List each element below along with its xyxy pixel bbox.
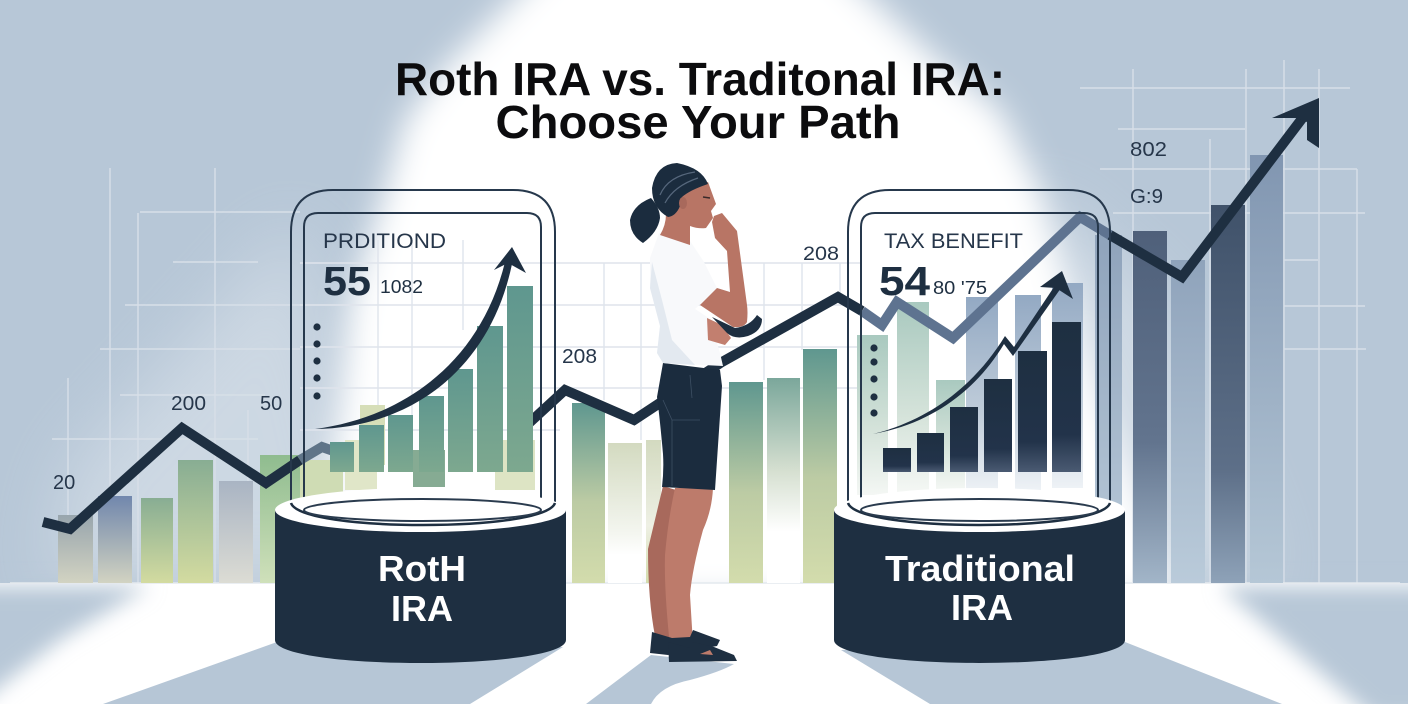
background grid: [10, 60, 1400, 583]
floor shadows from pedestals: [103, 642, 1282, 704]
chart number labels: G:9: [1130, 186, 1163, 208]
Roth IRA label: RotH: [378, 548, 466, 589]
front leg: [665, 488, 713, 646]
Roth glass frames: [291, 190, 555, 510]
floor corner shading: [0, 586, 1408, 704]
Traditional IRA label: [885, 548, 1075, 628]
arm and raised hand: [700, 213, 748, 327]
Traditional IRA label: Traditional: [885, 548, 1075, 589]
shadow under feet: [586, 655, 734, 704]
Traditional IRA label: IRA: [951, 587, 1013, 628]
Roth growth arrow: [315, 247, 526, 429]
panel: Roth IRA display case: [291, 190, 555, 510]
Traditional growth bars: [883, 322, 1081, 472]
chart number labels: 200: [171, 393, 206, 415]
neck and face: [660, 182, 716, 245]
hair highlights: [660, 172, 698, 203]
Roth panel heading: PRDITIOND: [323, 230, 446, 253]
Roth panel figures: [323, 258, 423, 304]
dark sleeve cuff: [712, 315, 762, 337]
Roth panel figures: 1082: [380, 277, 423, 297]
shorts: [657, 363, 722, 490]
center grid: [300, 240, 860, 440]
ear: [679, 197, 687, 209]
pedestal: Traditional IRA: [834, 488, 1125, 663]
background bar chart: [58, 155, 1283, 583]
lower hand: [707, 318, 731, 345]
Roth growth bars: [330, 286, 533, 472]
chart number labels: 50: [260, 393, 282, 415]
shirt shading: [650, 262, 695, 365]
Roth panel dots: [313, 323, 321, 400]
shoe cutout: [700, 650, 713, 655]
chart number labels: 208: [803, 244, 839, 265]
front shoe: [668, 642, 737, 662]
back leg: [648, 486, 676, 638]
background trend line with arrow: [43, 98, 1319, 529]
title: Choose Your Path: [496, 96, 900, 148]
figure: woman thinking: [586, 163, 762, 704]
shorts seams: [663, 375, 700, 486]
chart number labels: 20: [53, 472, 75, 494]
Traditional panel figures: 54: [879, 258, 930, 304]
title: [395, 53, 1005, 148]
Traditional panel figures: 80 '75: [933, 278, 987, 298]
chart number labels: 802: [1130, 139, 1167, 161]
Traditional panel dots: [870, 344, 878, 417]
Roth IRA label: [378, 548, 466, 629]
Traditional growth arrow: [873, 271, 1073, 434]
Roth panel figures: 55: [323, 258, 371, 304]
Traditional panel heading: TAX BENEFIT: [884, 230, 1023, 253]
ponytail: [630, 198, 660, 243]
title: Roth IRA vs. Traditonal IRA:: [395, 53, 1005, 105]
eye: [703, 197, 710, 198]
panel: Traditional IRA display case: [848, 190, 1110, 510]
chart number labels: 208: [562, 346, 597, 368]
Roth IRA label: IRA: [391, 588, 453, 629]
back shoe: [650, 630, 720, 655]
pedestal: Roth IRA: [275, 488, 566, 663]
Traditional panel figures: [879, 258, 987, 304]
shirt: [650, 233, 723, 366]
chart number labels: [53, 139, 1167, 494]
hair: [652, 163, 708, 217]
Traditional glass frames: [848, 190, 1110, 510]
